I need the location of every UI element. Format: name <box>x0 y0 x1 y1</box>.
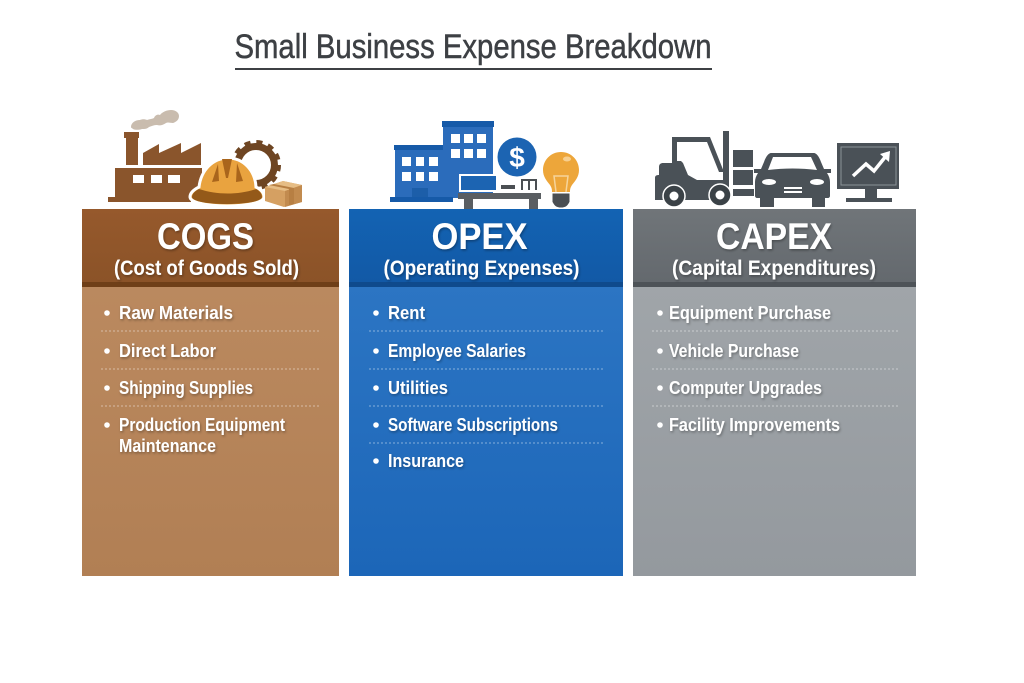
panel header: COGS <box>82 209 339 287</box>
panel: COGS <box>82 209 339 576</box>
panel header: CAPEX: (Capital Expenditures) <box>672 257 876 280</box>
list: OPEX items: Utilities <box>388 377 448 398</box>
icon: car <box>754 153 831 207</box>
list: OPEX items: Employee Salaries <box>388 340 526 361</box>
icon: forklift <box>654 131 754 207</box>
panel header: COGS: (Cost of Goods Sold) <box>114 257 299 280</box>
icon: dollar coin <box>498 138 536 176</box>
list: OPEX items: Software Subscriptions <box>388 414 558 435</box>
icon: COGS factory, hard hat, gear and box <box>108 110 302 207</box>
panel header: CAPEX: CAPEX <box>716 216 832 257</box>
icon: light bulb <box>543 152 579 208</box>
list: COGS items <box>101 302 320 456</box>
icon: smoke <box>131 110 179 130</box>
icon: monitor with trend <box>837 143 899 202</box>
list: COGS items: Production Equipment <box>119 414 285 435</box>
icon: dollar coin: $ <box>509 142 525 173</box>
icon: gear <box>234 142 278 188</box>
list: COGS items: Shipping Supplies <box>119 377 253 398</box>
list: COGS items: Raw Materials <box>119 302 233 323</box>
title: Small Business Expense Breakdown <box>234 28 712 66</box>
panel header: OPEX: OPEX <box>432 216 528 257</box>
list: CAPEX items: Vehicle Purchase <box>669 340 799 361</box>
panel header: OPEX: (Operating Expenses) <box>384 257 580 280</box>
list: OPEX items <box>369 302 604 471</box>
icon: CAPEX forklift, car and monitor <box>654 131 899 207</box>
icon: desk <box>458 175 541 209</box>
icon: buildings <box>390 121 494 202</box>
list: CAPEX items <box>652 302 898 435</box>
list: CAPEX items: Facility Improvements <box>669 414 840 435</box>
panel header: CAPEX <box>633 209 916 287</box>
panel: CAPEX <box>633 209 916 576</box>
list: OPEX items: Insurance <box>388 450 464 471</box>
panel header: OPEX <box>349 209 623 287</box>
panel header: COGS: COGS <box>157 216 254 257</box>
panel: OPEX <box>349 209 623 576</box>
icon: box <box>265 181 302 207</box>
list: CAPEX items: Equipment Purchase <box>669 302 831 323</box>
list: COGS items: Direct Labor <box>119 340 216 361</box>
list: COGS items: Maintenance <box>119 435 216 456</box>
list: CAPEX items: Computer Upgrades <box>669 377 822 398</box>
list: OPEX items: Rent <box>388 302 425 323</box>
icon: factory <box>108 132 202 202</box>
icon: OPEX buildings, dollar, desk and bulb <box>390 121 579 209</box>
icon: hard hat <box>190 158 264 206</box>
